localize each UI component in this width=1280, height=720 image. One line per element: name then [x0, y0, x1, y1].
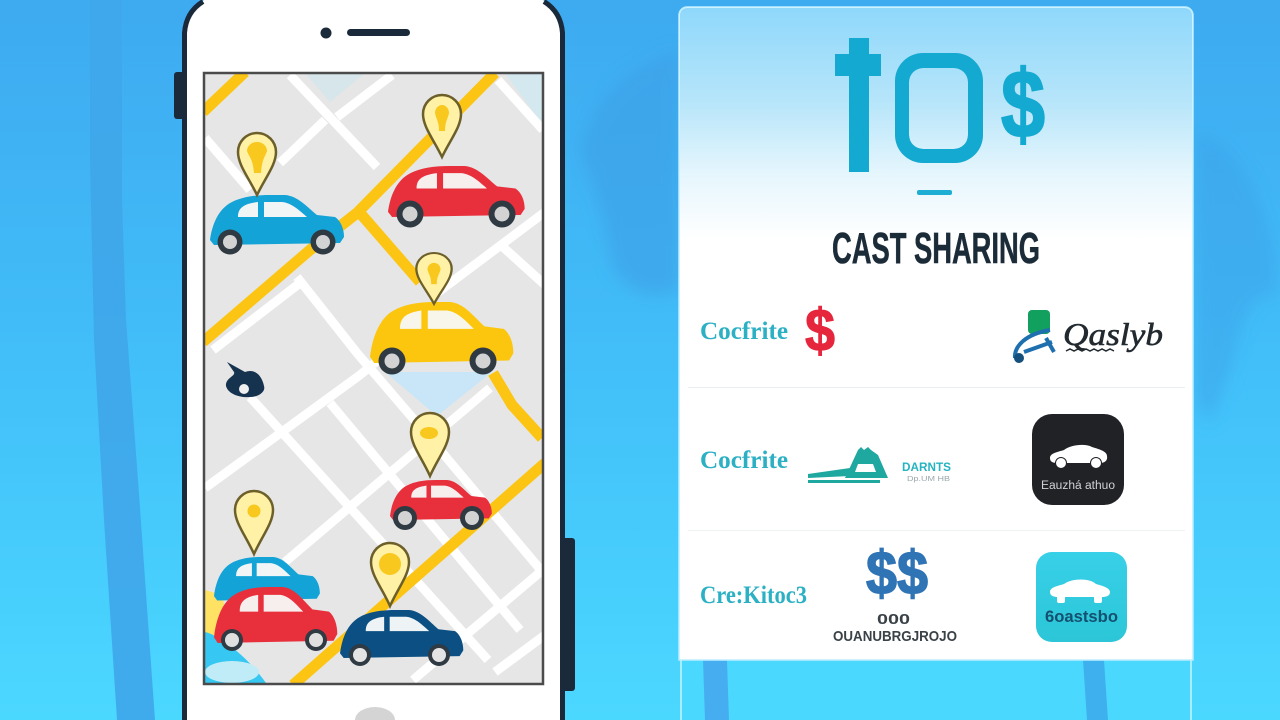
- app tile: teal: 6oastsbo: [1045, 607, 1118, 626]
- big price dollar sign: $: [1001, 51, 1045, 158]
- phone home button: [355, 707, 395, 720]
- row 3 caption: OUANUBRGJROJO: [833, 628, 957, 645]
- row 2 sublabel: Dp.UM HB: [907, 476, 950, 483]
- map bottom left blobs: [205, 590, 266, 683]
- phone outline: [184, 2, 562, 720]
- row 2: [700, 414, 1124, 505]
- row 2 bridge icon: [808, 447, 888, 483]
- app tile: dark: Eauzhá athuo: [1041, 480, 1115, 492]
- phone side button right: [561, 538, 575, 691]
- phone body: [184, 0, 562, 720]
- phone side button left: [174, 72, 186, 119]
- row 1 dollar: $: [805, 297, 835, 364]
- car: navy bottom: [340, 610, 463, 666]
- big price digit: 0: [891, 22, 987, 197]
- row 3 brand: Cre:Kitoc3: [700, 582, 807, 609]
- divider: [688, 530, 1185, 531]
- pin: over red car: [423, 95, 461, 157]
- car: yellow centre: [370, 302, 513, 374]
- row 2 label: DARNTS: [902, 460, 951, 474]
- pin: over small red car: [411, 413, 449, 476]
- car: small navy: [226, 362, 264, 397]
- app tile: dark: [1032, 414, 1124, 505]
- panel: cost sharing: [679, 0, 1193, 720]
- pin: over blue car: [238, 133, 276, 195]
- map white streets: [205, 75, 545, 680]
- car: red top right: [388, 166, 525, 228]
- pin: over yellow car: [416, 253, 452, 304]
- panel lower translucent area: [680, 650, 1192, 720]
- map base and water: [205, 73, 543, 683]
- row 3 dollars: $$: [866, 539, 928, 607]
- row 1 car and hand icon: [1014, 310, 1054, 363]
- map: [203, 72, 545, 685]
- divider: [688, 387, 1185, 388]
- pin: over lower blue car: [235, 491, 273, 554]
- phone camera: [320, 28, 332, 38]
- big price: [835, 38, 1045, 172]
- car: red small: [390, 480, 492, 530]
- car: blue lower left: [214, 557, 320, 600]
- row 3: [700, 539, 1127, 645]
- row 1 brand: Cocfrite: [700, 318, 788, 345]
- pin: over navy car: [371, 543, 409, 606]
- heading: CAST SHARING: [832, 224, 1040, 273]
- car: red lower left: [214, 587, 337, 651]
- map yellow routes: [203, 72, 545, 685]
- background: right palm fronds: [1196, 135, 1276, 425]
- background: left palm trunk: [90, 0, 155, 720]
- phone speaker: [347, 29, 410, 36]
- car: blue top left: [210, 195, 344, 254]
- row 3 number: 000: [877, 611, 910, 628]
- app tile: teal: [1036, 552, 1127, 642]
- phone: [174, 0, 575, 720]
- map frame: [204, 73, 543, 684]
- background: centre palm fronds: [580, 50, 680, 295]
- row 1: [700, 297, 1163, 364]
- panel sky header: [680, 8, 1192, 240]
- panel body: [679, 7, 1193, 660]
- heading accent dash: [917, 190, 952, 195]
- row 1 script label: Qaslyb: [1063, 316, 1163, 352]
- row 2 brand: Cocfrite: [700, 447, 788, 474]
